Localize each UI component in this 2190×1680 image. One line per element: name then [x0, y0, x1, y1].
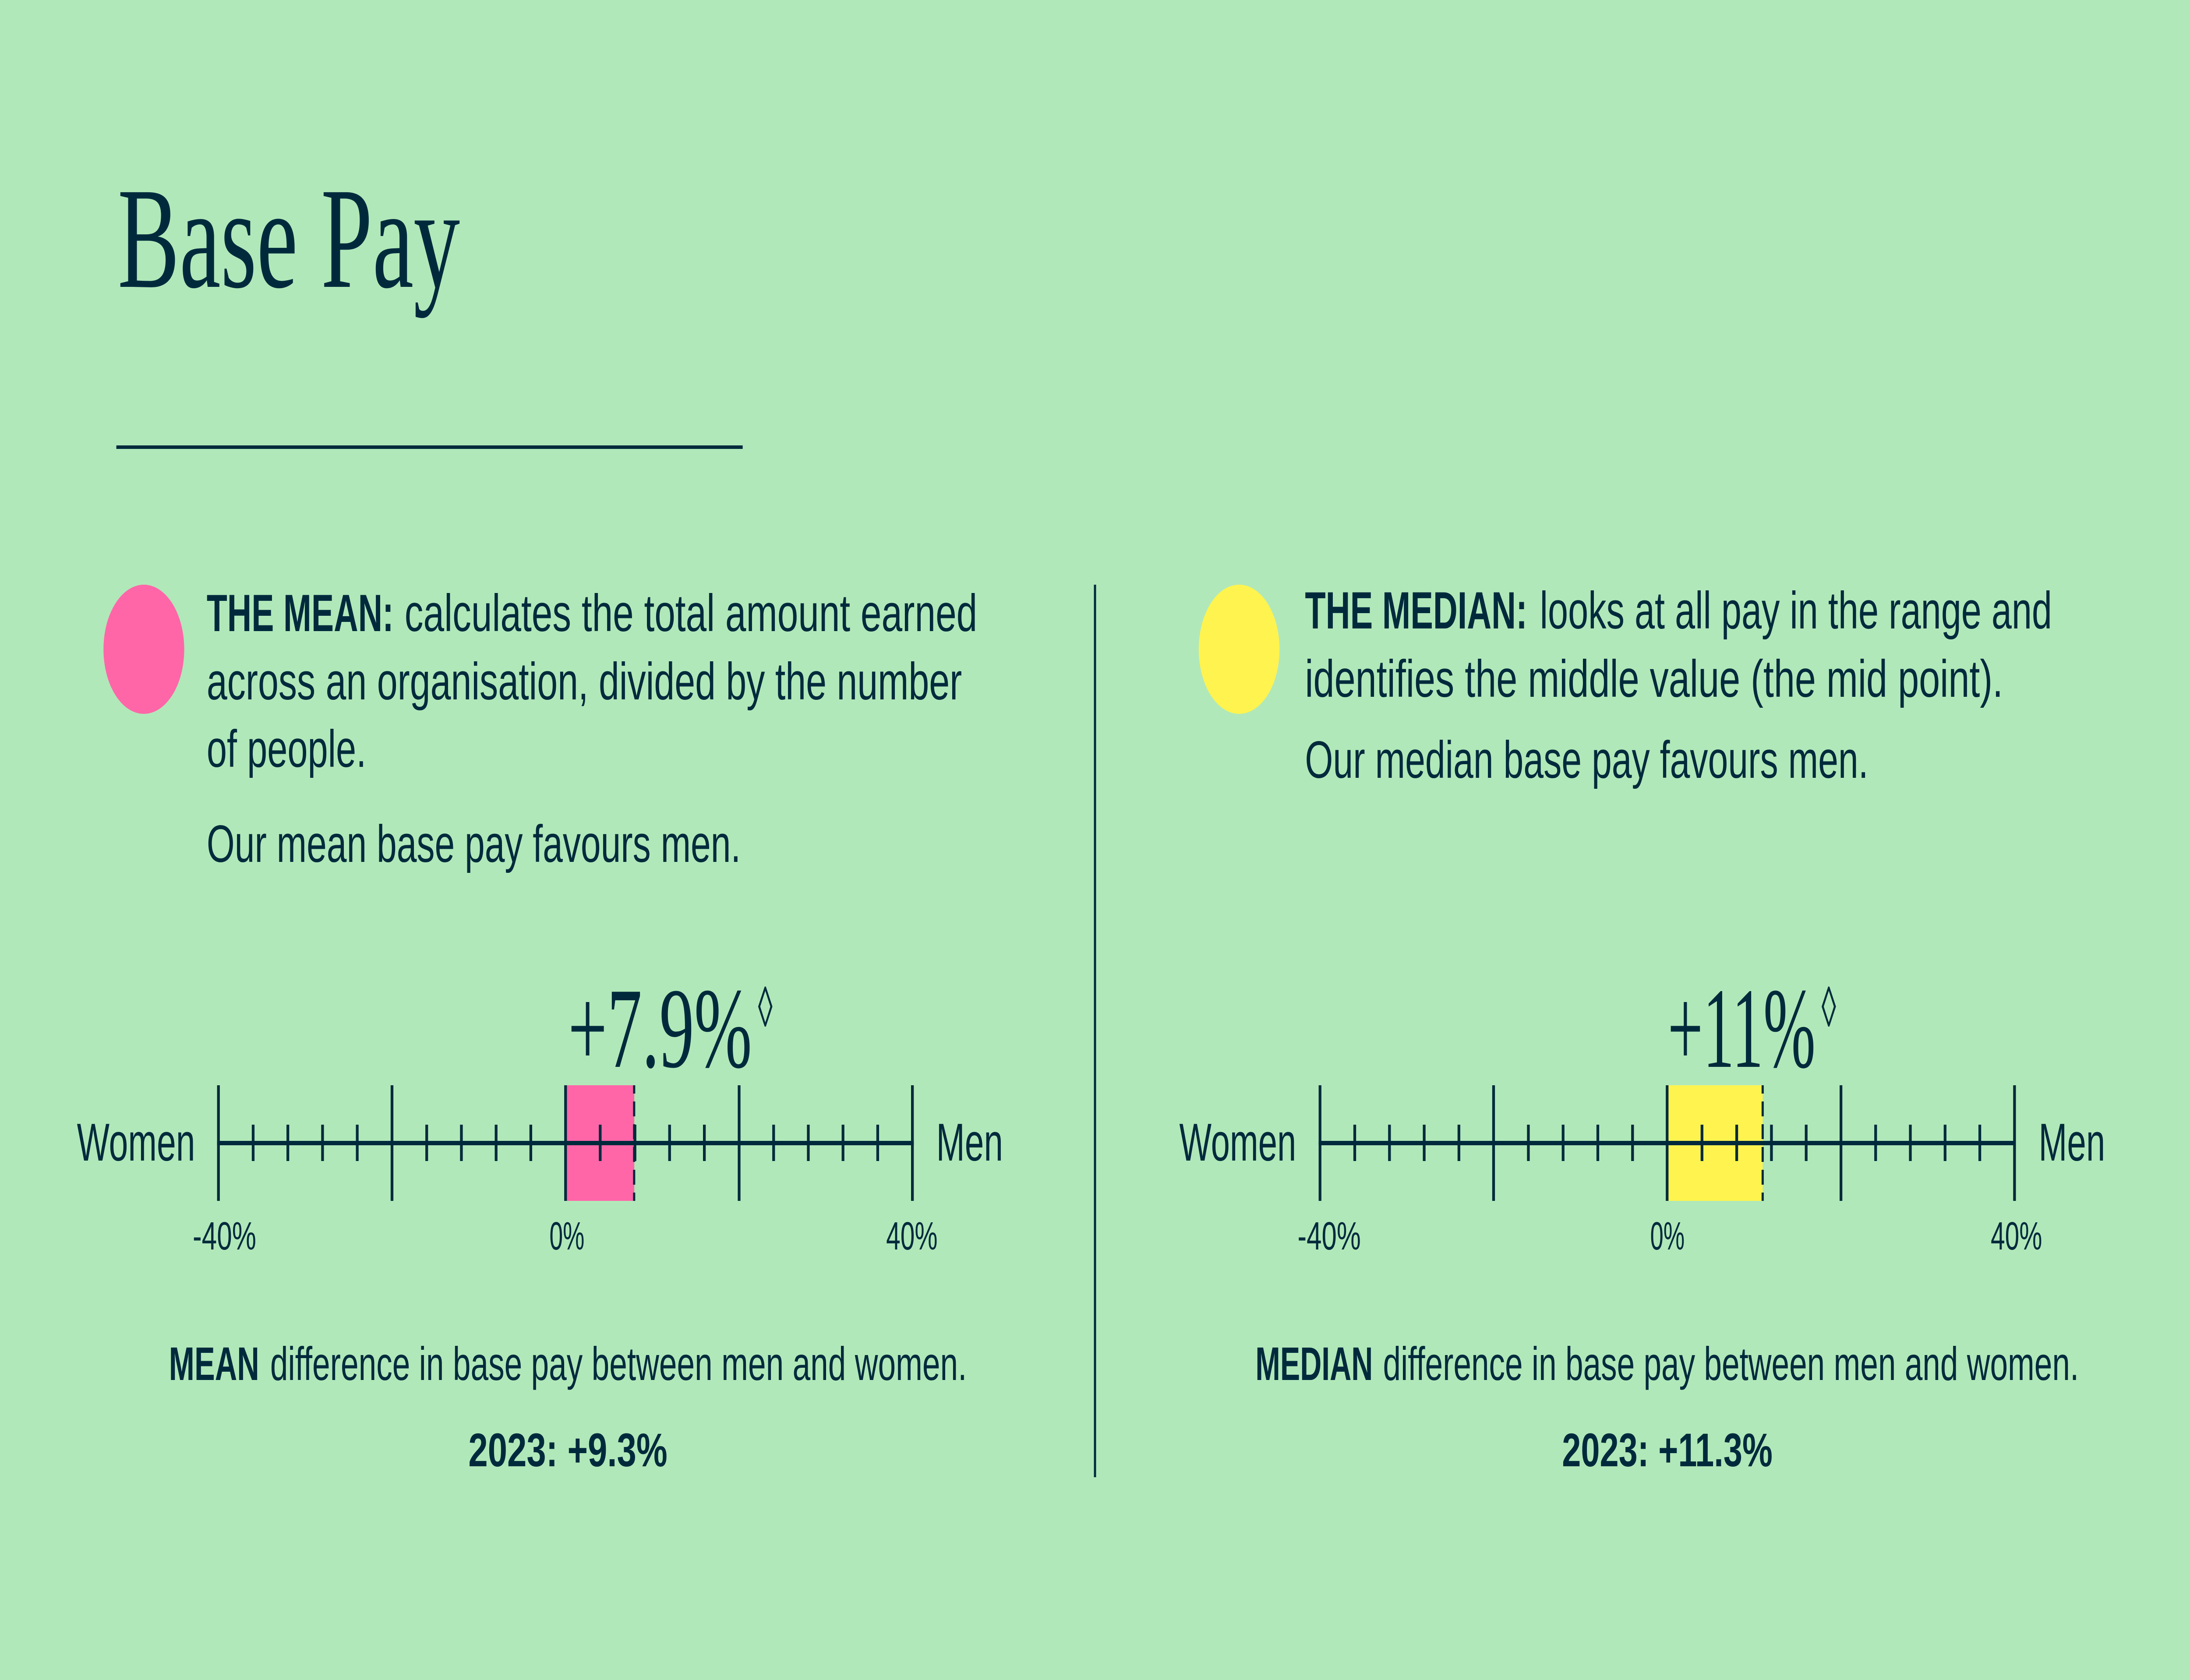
caption: mean 2023 value: 2023: +9.3% — [468, 1424, 668, 1477]
text block: mean definition: across an organisation, divided by the number — [207, 652, 962, 711]
text block: median definition: identifies the middle value (the mid point). — [1305, 649, 2003, 708]
bar: mean difference — [565, 1085, 634, 1201]
value: median +11%: ◊ — [1822, 976, 1836, 1039]
chart: mean scale: 0% — [549, 1214, 584, 1258]
caption: median difference: MEDIAN — [1255, 1338, 1373, 1391]
text block: median definition: Our median base pay favours men. — [1305, 731, 1869, 789]
text block: mean definition: of people. — [207, 720, 366, 778]
chart: mean scale: Women — [77, 1112, 195, 1172]
bar: median difference — [1667, 1085, 1763, 1201]
icon: yellow circle — [1199, 585, 1279, 714]
panel: mean — [77, 584, 1003, 1477]
text block: median definition: THE MEDIAN: — [1305, 581, 1527, 640]
chart: median scale: 40% — [1991, 1214, 2042, 1258]
chart: median scale: 0% — [1650, 1214, 1685, 1258]
text block: mean definition: THE MEAN: — [207, 584, 394, 642]
caption: median 2023 value: 2023: +11.3% — [1562, 1424, 1773, 1477]
chart: median scale — [1179, 1085, 2105, 1258]
chart: median scale: Men — [2038, 1112, 2105, 1172]
text block: mean definition: calculates the total amount earned — [405, 584, 977, 642]
value: median +11%: +11% — [1668, 965, 1816, 1092]
chart: mean scale: -40% — [193, 1214, 256, 1258]
caption: mean difference: difference in base pay between men and women. — [270, 1338, 967, 1391]
chart: mean scale: 40% — [886, 1214, 938, 1258]
title: Base Pay — [118, 158, 460, 318]
chart: median scale: -40% — [1297, 1214, 1361, 1258]
panel: median — [1179, 581, 2105, 1477]
icon: pink circle — [103, 585, 184, 714]
value: mean +7.9%: +7.9% — [568, 965, 752, 1092]
text block: mean definition — [207, 584, 977, 873]
text block: mean definition: Our mean base pay favours men. — [207, 815, 741, 873]
text block: median definition — [1305, 581, 2052, 789]
chart: mean scale: Men — [936, 1112, 1003, 1172]
chart: median scale: Women — [1179, 1112, 1296, 1172]
caption: mean difference: MEAN — [169, 1338, 259, 1391]
caption: median difference: difference in base pay between men and women. — [1383, 1338, 2079, 1391]
value: mean +7.9%: ◊ — [758, 976, 773, 1039]
chart: mean scale — [77, 1085, 1003, 1258]
text block: median definition: looks at all pay in the range and — [1540, 581, 2052, 640]
